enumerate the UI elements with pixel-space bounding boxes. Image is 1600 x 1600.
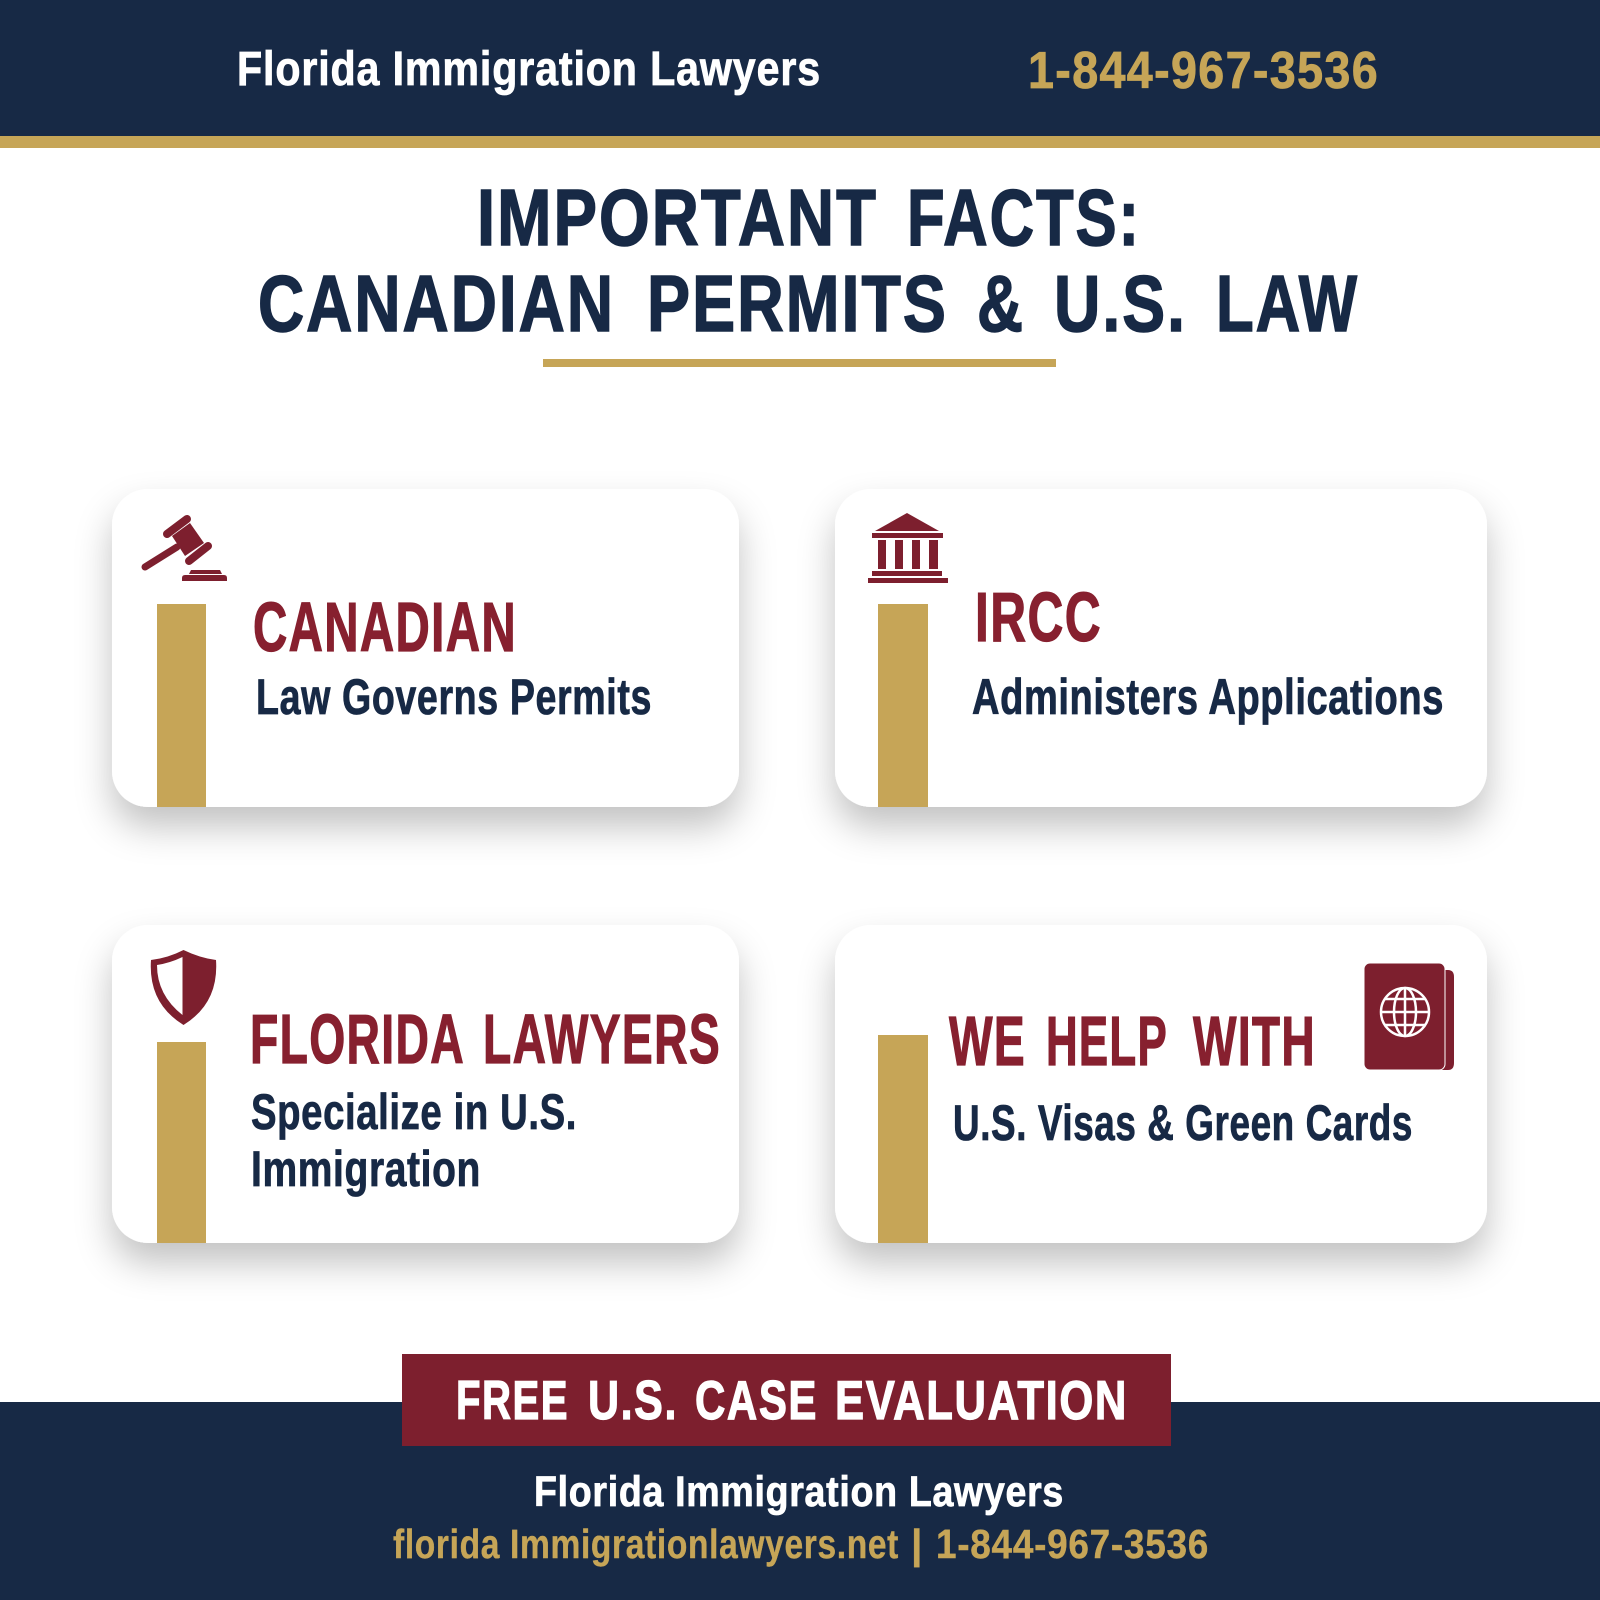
icon: shield <box>151 950 216 1025</box>
heading: We Help With: HELP <box>1046 1002 1168 1080</box>
heading: Florida Lawyers <box>250 1000 721 1078</box>
header phone number: 1-844-967-3536 <box>1028 42 1379 100</box>
footer website and phone: | <box>911 1521 923 1567</box>
panel: IRCC <box>835 489 1487 807</box>
call to action banner: FREE <box>456 1369 569 1431</box>
title underline <box>543 359 1056 367</box>
footer website and phone: 1-844-967-3536 <box>936 1521 1209 1567</box>
footer firm name: Florida Immigration Lawyers <box>534 1468 1064 1516</box>
call to action banner <box>402 1354 1171 1446</box>
heading: We Help With: WITH <box>1193 1002 1316 1080</box>
title: IMPORTANT <box>477 173 878 262</box>
title: U.S. <box>1054 259 1187 348</box>
title: PERMITS <box>647 259 948 348</box>
text: Specialize in U.S. Immigration: Specialize in U.S. <box>251 1084 577 1140</box>
text: Administers Applications: Administers Applications <box>972 669 1444 725</box>
call to action banner: EVALUATION <box>835 1369 1128 1431</box>
title: CANADIAN <box>258 259 615 348</box>
text: Specialize in U.S. Immigration <box>251 1084 577 1197</box>
text: U.S. Visas & Green Cards: U.S. Visas & Green Cards <box>953 1095 1413 1151</box>
header band <box>0 0 1600 148</box>
footer band <box>0 1402 1600 1600</box>
heading: Florida Lawyers: FLORIDA <box>250 1000 465 1078</box>
icon: government building <box>868 513 948 583</box>
header firm name: Florida Immigration Lawyers <box>237 43 821 96</box>
title: & <box>977 259 1025 348</box>
icon: gavel <box>145 519 227 581</box>
title: LAW <box>1216 259 1359 348</box>
text: Law Governs Permits: Law Governs Permits <box>256 669 652 725</box>
title <box>258 173 1359 348</box>
panel: Florida Lawyers <box>112 925 739 1243</box>
heading: We Help With <box>949 1002 1316 1080</box>
icon: passport <box>1364 963 1454 1070</box>
text: Specialize in U.S. Immigration: Immigration <box>251 1141 481 1197</box>
heading: We Help With: WE <box>949 1002 1026 1080</box>
panel: We Help With <box>835 925 1487 1243</box>
heading: Canadian: CANADIAN <box>253 588 517 666</box>
panel: Canadian law <box>112 489 739 807</box>
call to action banner: CASE <box>695 1369 818 1431</box>
heading: Florida Lawyers: LAWYERS <box>483 1000 721 1078</box>
call to action banner: U.S. <box>588 1369 678 1431</box>
title: FACTS: <box>907 173 1141 262</box>
heading: IRCC: IRCC <box>975 578 1102 656</box>
footer website and phone: florida Immigrationlawyers.net <box>393 1521 899 1567</box>
